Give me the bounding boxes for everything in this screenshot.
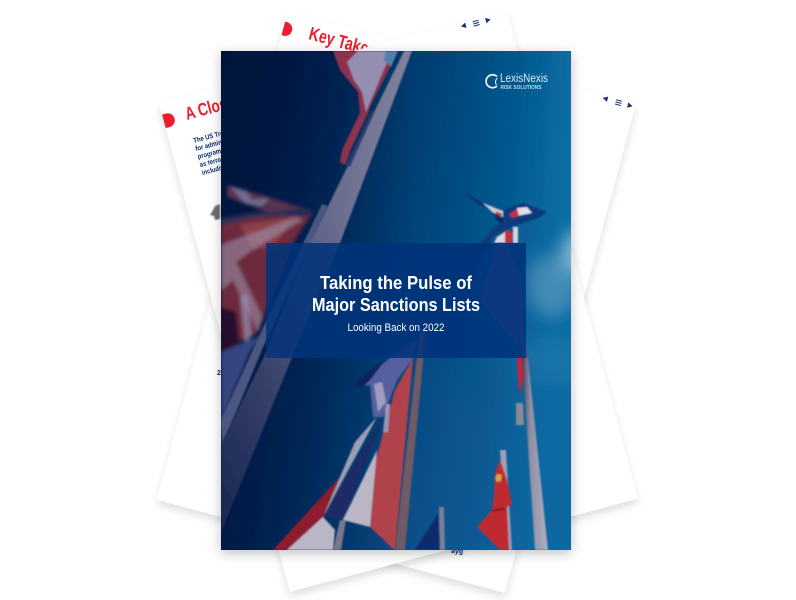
flag: right hanging flag (480, 243, 526, 358)
logo: LexisNexis Risk Solutions: RISK SOLUTIONS (500, 85, 542, 91)
icon: logo globe (486, 75, 498, 88)
title: Major Sanctions Lists (312, 295, 480, 315)
page text fragment bottom: ayg (451, 548, 463, 556)
pole: large left pole (221, 51, 412, 532)
page text fragment left: 2 (217, 370, 221, 377)
flag: small navy flag and pole (415, 507, 445, 550)
icons: page navigation (460, 16, 491, 30)
pole: bottom small pole (333, 520, 346, 550)
pole: right pole (522, 358, 548, 550)
flag: centre flag (273, 340, 417, 550)
title panel (266, 243, 526, 358)
text block: intro: The US Treasury (193, 126, 240, 145)
text block: intro: for administering (195, 133, 244, 153)
flag: right pennant (466, 194, 548, 244)
pole: centre pole (395, 330, 426, 550)
text block: intro (193, 125, 250, 177)
icon: red tab (282, 22, 294, 37)
text block: intro: as terrorists (199, 153, 234, 169)
text block: intro: programs (197, 147, 226, 161)
flag: left union flag (221, 185, 315, 425)
report cover (221, 51, 588, 550)
flag: top flag (333, 51, 398, 167)
pole: small left pole (221, 204, 328, 446)
heading: Key Takeaways: Key Takeaways (307, 24, 411, 70)
heading: A Closer Look: A Closer Look (183, 82, 277, 124)
flag: red flag and pole (477, 450, 512, 550)
back page: A Closer Look (159, 10, 638, 592)
icon: grey map fragment (210, 204, 220, 220)
logo: LexisNexis Risk Solutions (486, 73, 548, 91)
title: Taking the Pulse of (320, 273, 473, 293)
icons: page navigation (602, 95, 633, 109)
text block: intro: including (201, 163, 229, 177)
subtitle: Looking Back on 2022 (348, 322, 444, 334)
title (312, 273, 480, 315)
icon: red tab (162, 112, 176, 128)
back page: Key Takeaways (157, 11, 636, 593)
logo: LexisNexis Risk Solutions: LexisNexis (500, 73, 548, 85)
sky background (221, 51, 588, 550)
